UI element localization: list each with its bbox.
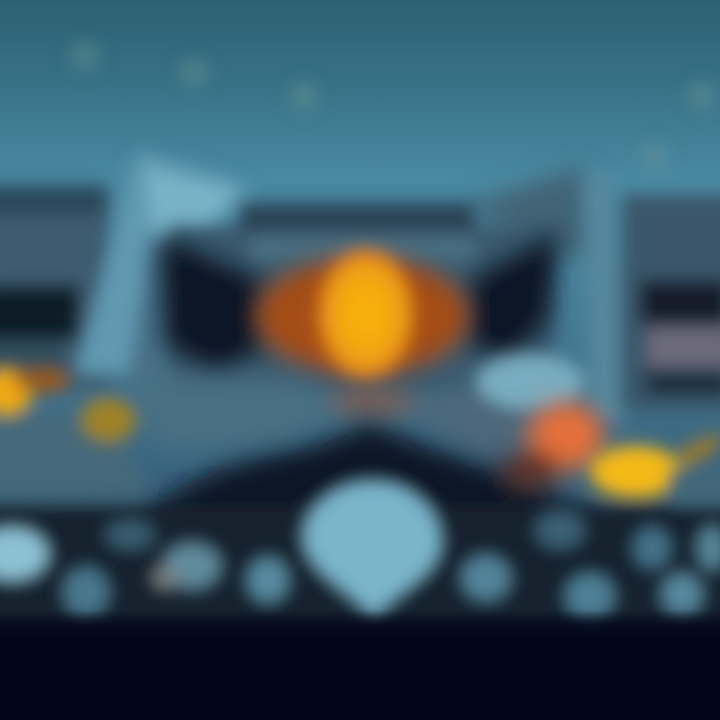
orange glow: [500, 402, 604, 490]
warm reflection under core: [328, 388, 416, 416]
bottom right mound: [670, 470, 720, 505]
bottom black band: [0, 610, 720, 720]
left yellow glows: [0, 368, 136, 442]
dark right wing: [470, 232, 558, 360]
left mound: [0, 414, 148, 505]
yellow glow right: [590, 432, 720, 498]
light dome: [476, 354, 584, 410]
right building panel: [622, 195, 720, 410]
light blue flag and left column: [74, 150, 250, 374]
yellow central core: [318, 250, 414, 378]
right column: [585, 172, 625, 425]
central panel: [170, 203, 555, 395]
bottom dark band: [0, 505, 720, 640]
faint stars: [71, 42, 716, 168]
right wing top: [465, 165, 590, 260]
left building panel: [0, 185, 110, 390]
dark arc: [135, 422, 600, 570]
orange halo: [256, 258, 468, 374]
lower gray blue band: [130, 375, 560, 460]
central heart shape: [302, 480, 442, 620]
small light blobs: [0, 510, 720, 620]
left column backing: [120, 235, 180, 385]
dark left wing: [160, 235, 262, 372]
